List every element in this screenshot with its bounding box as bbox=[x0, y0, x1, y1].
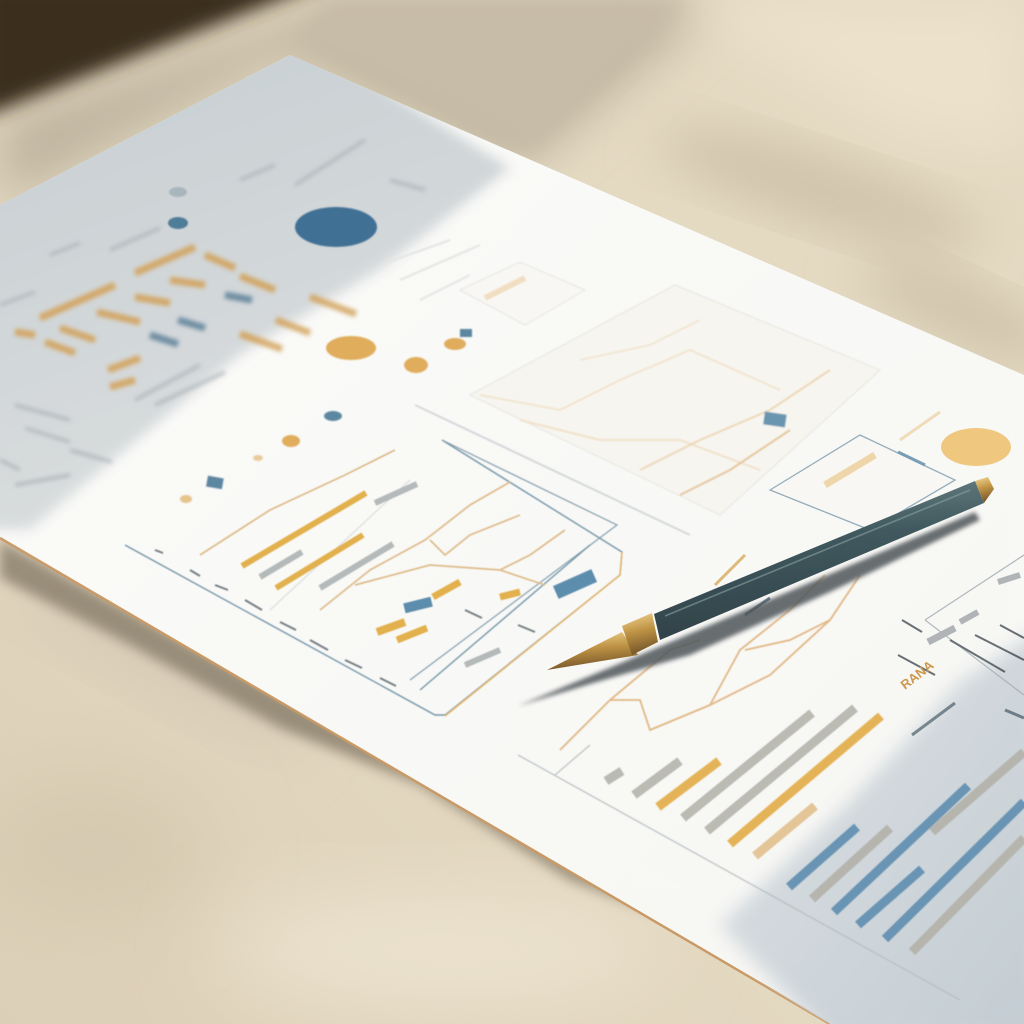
panel: right edge table bbox=[898, 555, 1024, 695]
grey bars bbox=[606, 708, 1024, 952]
blue labels bbox=[403, 597, 433, 613]
pen end cap bbox=[975, 477, 994, 503]
chart frame bbox=[125, 440, 622, 715]
blue table cells bbox=[150, 295, 252, 344]
pen nib bbox=[547, 632, 638, 670]
heading: orange rotated label: RANA bbox=[898, 657, 937, 692]
icon: orange blobs bbox=[180, 336, 466, 503]
pen body bbox=[654, 481, 984, 640]
caption marks near the lower chart bbox=[715, 555, 1024, 735]
panel: central chart bbox=[125, 440, 622, 716]
shaded paper region top left bbox=[0, 30, 510, 530]
icon: large blue circle bbox=[295, 207, 377, 247]
pen highlight bbox=[665, 490, 970, 616]
tan branching lines bbox=[560, 575, 860, 750]
icon: small blue dots bbox=[168, 187, 472, 489]
pen bbox=[547, 477, 994, 670]
pen cast shadow bbox=[518, 512, 980, 706]
pen collar bbox=[622, 613, 658, 655]
small tick marks bbox=[155, 550, 535, 686]
chart axis bbox=[518, 755, 960, 1000]
orange table cells bbox=[15, 247, 356, 387]
blue bars bbox=[789, 786, 1024, 939]
paper cast shadow on cloth bbox=[0, 540, 660, 915]
panel: upper left chart block bbox=[0, 140, 425, 485]
panel: upper centre faint map chart bbox=[380, 240, 880, 535]
tan branching lines bbox=[200, 450, 565, 610]
soft light wash bbox=[126, 302, 1021, 858]
panel: lower right chart bbox=[518, 575, 1024, 1000]
icon: yellow circle bbox=[941, 428, 1011, 466]
yellow bars bbox=[242, 493, 520, 640]
dark corner top left bbox=[0, 0, 330, 118]
yellow bars bbox=[658, 716, 881, 856]
panel: right small frame bbox=[770, 412, 955, 530]
grey captions bbox=[0, 140, 425, 485]
shaded paper region bottom right bbox=[720, 630, 1024, 1024]
grey bars bbox=[260, 484, 500, 665]
